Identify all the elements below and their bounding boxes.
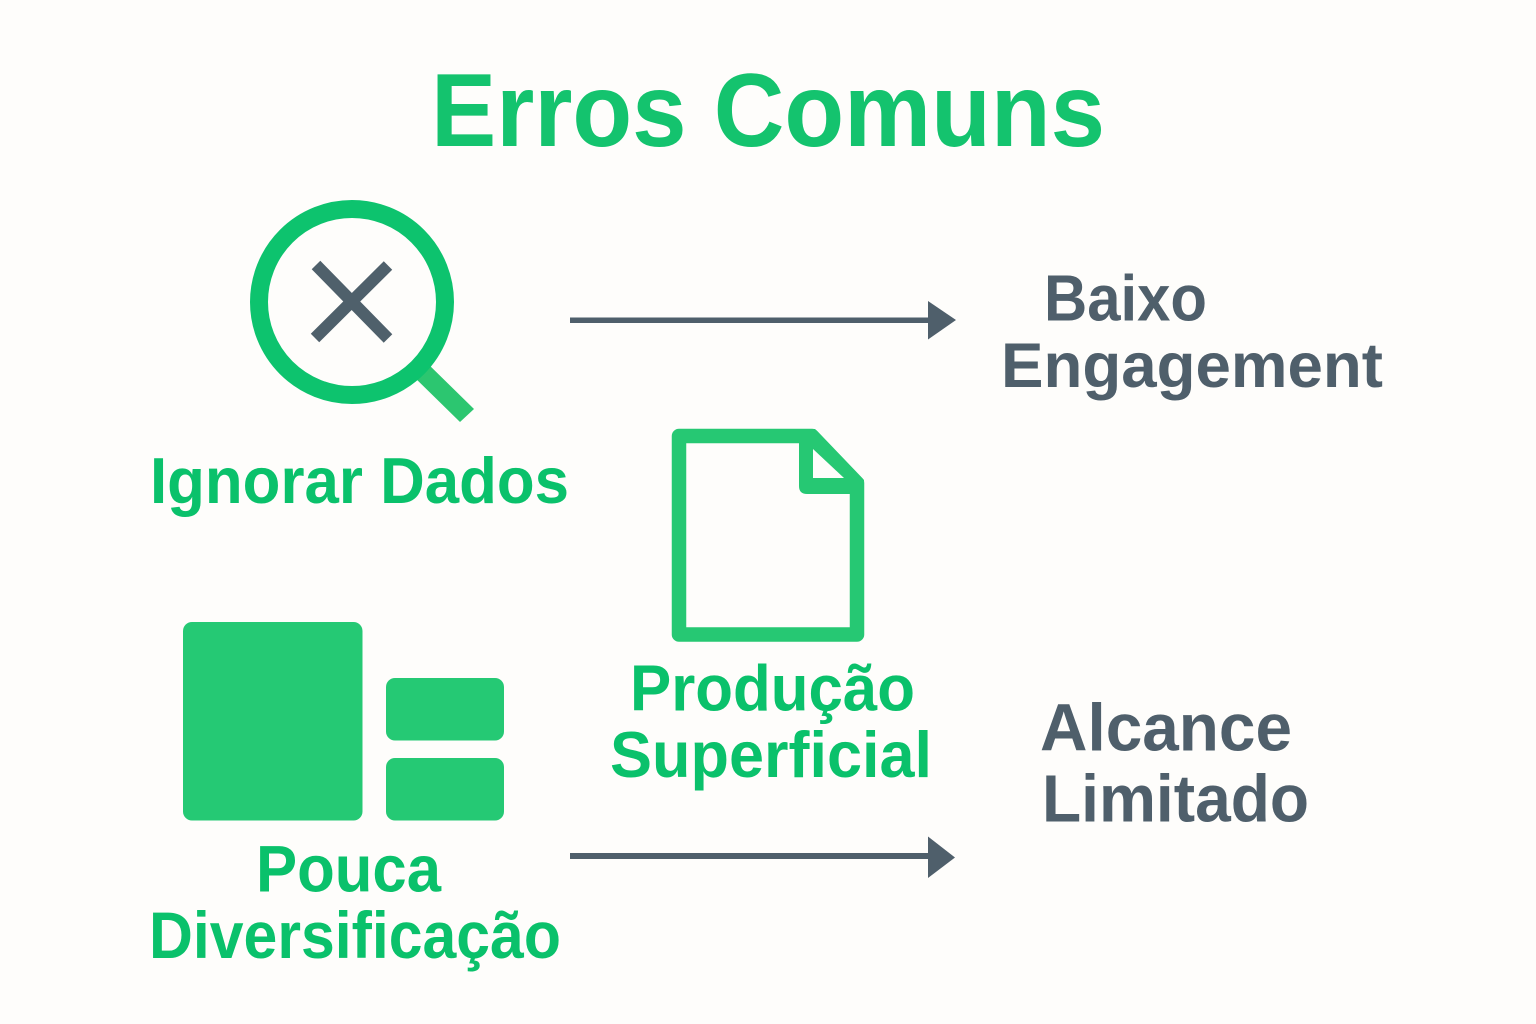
icon: document — [679, 429, 864, 634]
icon: content blocks — [183, 622, 504, 820]
label: Produção Superficial — [610, 652, 932, 791]
label: Pouca Diversificação — [149, 832, 561, 972]
label: Pouca Diversificação: Diversificação — [149, 898, 561, 972]
arrow: top — [570, 301, 956, 340]
arrow: bottom — [570, 836, 955, 878]
label: Produção Superficial: Produção — [630, 652, 915, 724]
label: Pouca Diversificação: Pouca — [256, 832, 442, 906]
outcome: Baixo Engagement: Engagement — [1001, 331, 1383, 401]
label: Produção Superficial: Superficial — [610, 718, 932, 791]
icon: magnifying glass with X — [259, 209, 474, 422]
outcome: Baixo Engagement — [1001, 262, 1383, 401]
label: Ignorar Dados: Ignorar Dados — [150, 444, 569, 517]
outcome: Alcance Limitado: Limitado — [1042, 762, 1309, 836]
outcome: Alcance Limitado — [1040, 690, 1309, 836]
outcome: Alcance Limitado: Alcance — [1040, 690, 1292, 766]
title: Erros Comuns — [431, 53, 1105, 169]
outcome: Baixo Engagement: Baixo — [1044, 262, 1207, 334]
